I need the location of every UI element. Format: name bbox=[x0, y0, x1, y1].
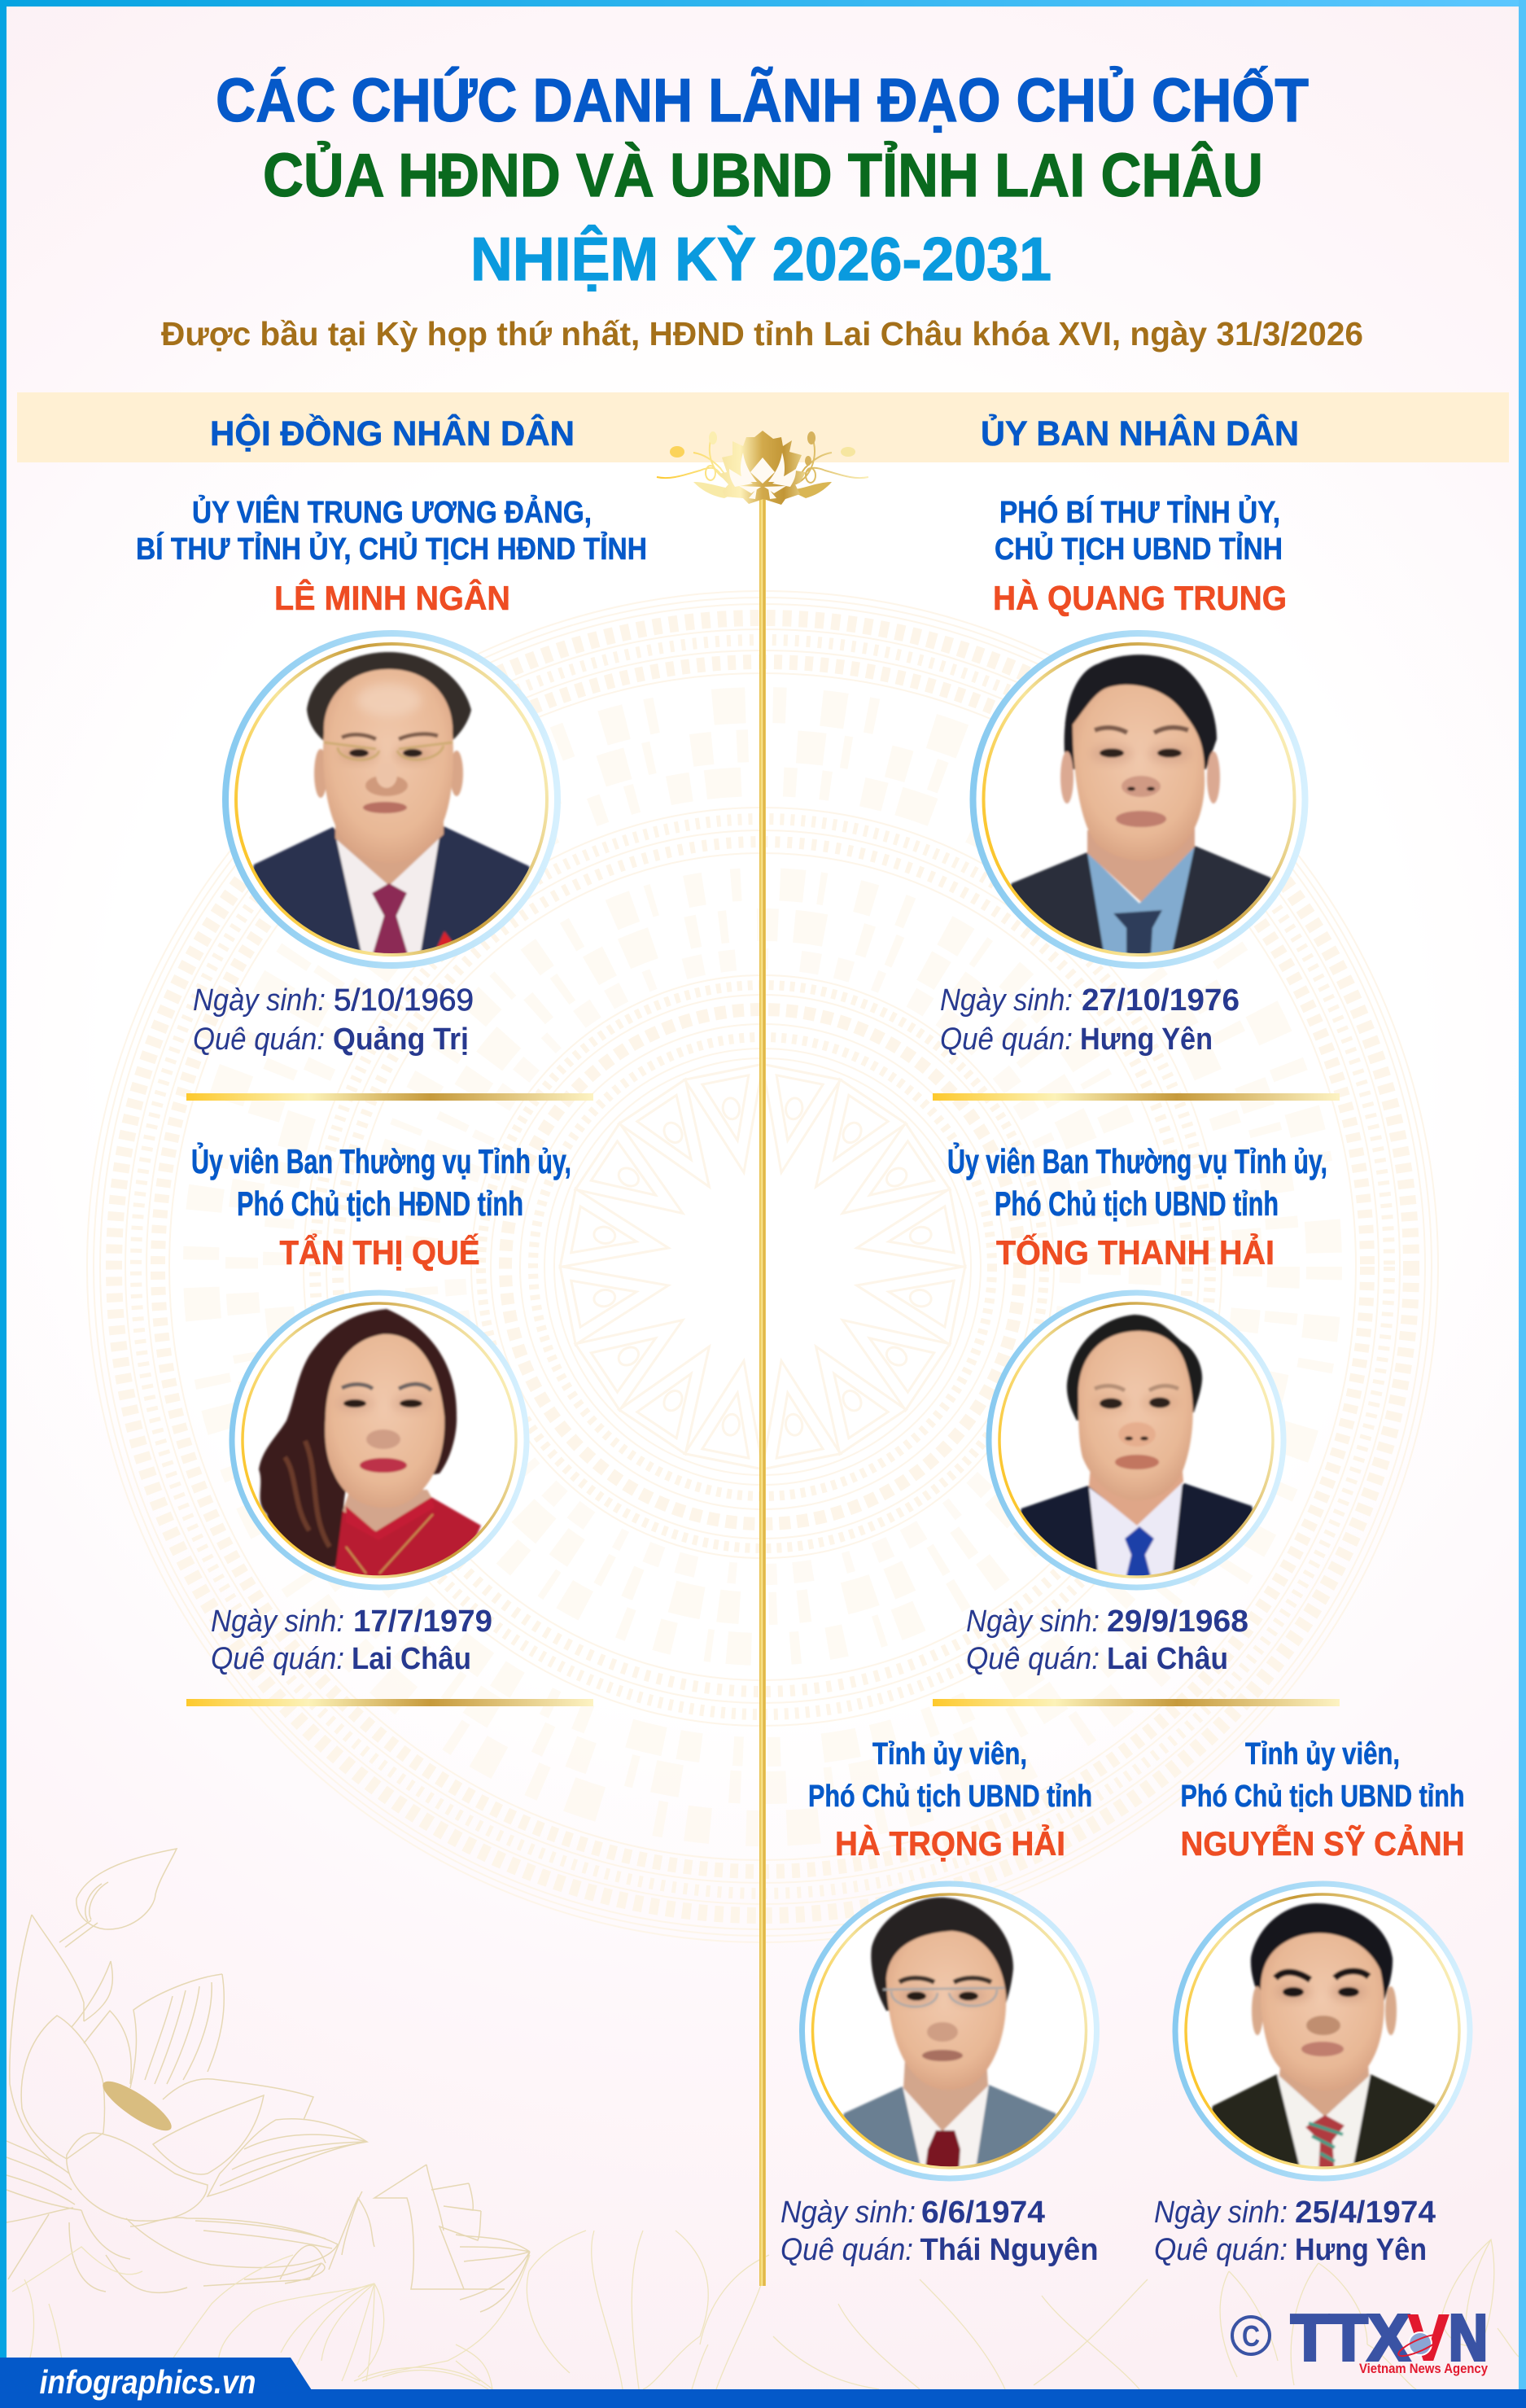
lotus line art: bottom right bbox=[773, 2239, 1519, 2389]
copyright mark bbox=[1232, 2317, 1270, 2354]
divider bbox=[186, 1699, 593, 1706]
person: Hà Trọng Hải: Quê quán: bbox=[780, 2233, 913, 2267]
website: infographics.vn bbox=[39, 2363, 256, 2401]
person: Hà Quang Trung: Quê quán: bbox=[940, 1022, 1073, 1057]
title line 1: CÁC CHỨC DANH LÃNH ĐẠO CHỦ CHỐT bbox=[216, 66, 1309, 134]
name: NGUYỄN SỸ CẢNH bbox=[1180, 1824, 1465, 1863]
TTXVN logo: N bbox=[1449, 2301, 1488, 2374]
person: Hà Trọng Hải: 6/6/1974 bbox=[921, 2196, 1045, 2230]
person: Lê Minh Ngân: Quảng Trị bbox=[333, 1022, 469, 1057]
divider bbox=[186, 1093, 593, 1101]
name: TỐNG THANH HẢI bbox=[996, 1232, 1275, 1272]
person: Tẩn Thị Quế: Lai Châu bbox=[352, 1642, 471, 1676]
name: TẨN THỊ QUẾ bbox=[280, 1232, 480, 1272]
details: Ngày sinh: bbox=[211, 1605, 344, 1639]
person: Lê Minh Ngân: 5/10/1969 bbox=[334, 983, 474, 1018]
title line 3: NHIỆM KỲ 2026-2031 bbox=[470, 225, 1052, 293]
agency name: Vietnam News Agency bbox=[1359, 2361, 1488, 2376]
person: Tống Thanh Hải bbox=[933, 1141, 1340, 1706]
person: Hà Quang Trung: 27/10/1976 bbox=[1082, 983, 1240, 1018]
portrait bbox=[1175, 1884, 1470, 2190]
person: Nguyễn Sỹ Cảnh: Hưng Yên bbox=[1295, 2233, 1427, 2267]
person: Hà Quang Trung: CHỦ TỊCH UBND TỈNH bbox=[995, 531, 1283, 567]
details: Ngày sinh: bbox=[940, 983, 1073, 1018]
portrait bbox=[802, 1884, 1097, 2190]
title line 2: CỦA HĐND VÀ UBND TỈNH LAI CHÂU bbox=[263, 141, 1263, 209]
person: Hà Quang Trung: Hưng Yên bbox=[1080, 1022, 1213, 1057]
position: PHÓ BÍ THƯ TỈNH ỦY, bbox=[999, 494, 1280, 530]
person: Hà Trọng Hải bbox=[780, 1737, 1099, 2267]
TTXVN logo: C bbox=[1242, 2319, 1260, 2353]
portrait bbox=[989, 1293, 1283, 1596]
bronze drum ornament bbox=[87, 591, 1438, 1942]
person: Tẩn Thị Quế bbox=[186, 1141, 593, 1706]
details: Ngày sinh: bbox=[193, 983, 326, 1018]
portrait bbox=[225, 633, 562, 977]
heading: right column: ỦY BAN NHÂN DÂN bbox=[981, 414, 1299, 453]
person: Tống Thanh Hải: Quê quán: bbox=[966, 1642, 1100, 1676]
details: Ngày sinh: bbox=[780, 2196, 916, 2230]
logo letters: TTX bbox=[1291, 2301, 1410, 2374]
person: Hà Quang Trung bbox=[933, 494, 1340, 1101]
person: Hà Trọng Hải: Phó Chủ tịch UBND tỉnh bbox=[808, 1780, 1092, 1814]
footer bar bbox=[0, 2358, 1526, 2408]
position: Ủy viên Ban Thường vụ Tỉnh ủy, bbox=[947, 1141, 1327, 1180]
details: Ngày sinh: bbox=[966, 1605, 1100, 1639]
icon: golden lotus bbox=[657, 431, 868, 505]
position: Tỉnh ủy viên, bbox=[1245, 1737, 1400, 1771]
divider bbox=[933, 1093, 1340, 1101]
column header band bbox=[17, 392, 1509, 462]
person: Nguyễn Sỹ Cảnh bbox=[1154, 1737, 1470, 2267]
name: LÊ MINH NGÂN bbox=[274, 578, 510, 617]
name: HÀ TRỌNG HẢI bbox=[835, 1824, 1065, 1863]
name: HÀ QUANG TRUNG bbox=[993, 579, 1287, 617]
person: Lê Minh Ngân bbox=[136, 494, 647, 1101]
person: Tẩn Thị Quế: Phó Chủ tịch HĐND tỉnh bbox=[237, 1184, 523, 1223]
globe bbox=[1409, 2332, 1432, 2355]
person: Tẩn Thị Quế: 17/7/1979 bbox=[353, 1605, 492, 1639]
TTXVN logo: V bbox=[1408, 2301, 1449, 2374]
person: Tống Thanh Hải: Phó Chủ tịch UBND tỉnh bbox=[995, 1184, 1279, 1223]
position: ỦY VIÊN TRUNG ƯƠNG ĐẢNG, bbox=[192, 494, 592, 530]
person: Tống Thanh Hải: Lai Châu bbox=[1107, 1642, 1228, 1676]
person: Nguyễn Sỹ Cảnh: 25/4/1974 bbox=[1295, 2196, 1436, 2230]
central vertical divider bbox=[759, 497, 766, 2286]
person: Tẩn Thị Quế: Quê quán: bbox=[211, 1642, 344, 1676]
lotus line art: bottom left bbox=[7, 1849, 769, 2389]
subtitle: Được bầu tại Kỳ họp thứ nhất, HĐND tỉnh Lai Châu khóa XVI, ngày 31/3/2026 bbox=[161, 315, 1363, 352]
person: Nguyễn Sỹ Cảnh: Quê quán: bbox=[1154, 2233, 1288, 2267]
person: Tống Thanh Hải: 29/9/1968 bbox=[1107, 1605, 1248, 1639]
details: Ngày sinh: bbox=[1154, 2196, 1288, 2230]
TTXVN logo bbox=[1232, 2301, 1488, 2376]
person: Lê Minh Ngân: Quê quán: bbox=[193, 1022, 325, 1057]
heading: left column: HỘI ĐỒNG NHÂN DÂN bbox=[210, 414, 575, 453]
person: Lê Minh Ngân: BÍ THƯ TỈNH ỦY, CHỦ TỊCH HĐND TỈNH bbox=[136, 531, 647, 567]
portrait bbox=[973, 633, 1310, 977]
position: Tỉnh ủy viên, bbox=[872, 1737, 1027, 1771]
position: Ủy viên Ban Thường vụ Tỉnh ủy, bbox=[191, 1141, 571, 1180]
person: Hà Trọng Hải: Thái Nguyên bbox=[920, 2233, 1099, 2267]
divider bbox=[933, 1699, 1340, 1706]
title bbox=[161, 66, 1363, 352]
person: Nguyễn Sỹ Cảnh: Phó Chủ tịch UBND tỉnh bbox=[1180, 1780, 1465, 1814]
portrait bbox=[232, 1293, 527, 1587]
